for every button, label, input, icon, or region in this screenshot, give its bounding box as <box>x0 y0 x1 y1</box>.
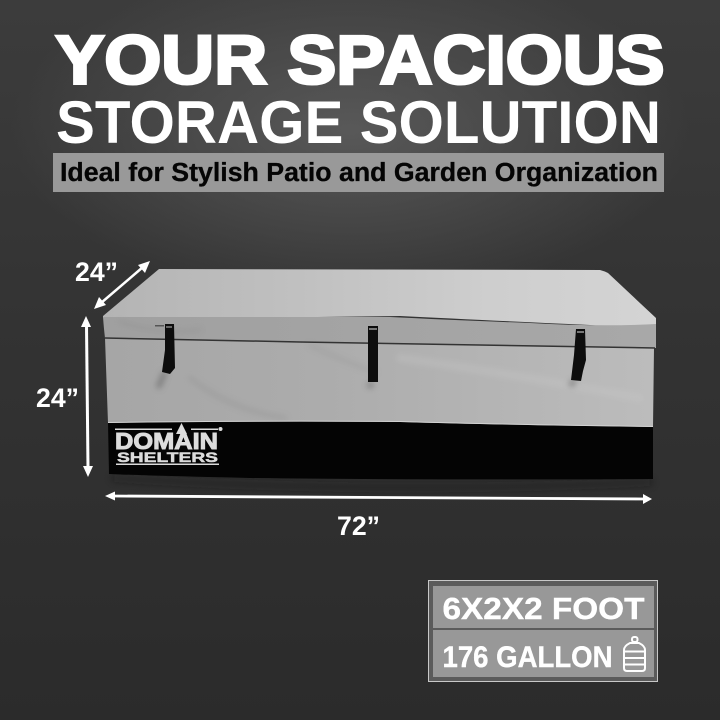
logo wordmark peak <box>176 423 187 434</box>
dimension arrow: height <box>81 316 93 477</box>
row: capacity <box>433 630 654 677</box>
logo top rule <box>115 428 218 430</box>
ground shadow <box>112 476 652 490</box>
fabric folds <box>120 322 640 418</box>
subtitle banner: Ideal for Stylish Patio and Garden Organization <box>60 159 658 187</box>
logo bottom rule <box>116 464 219 465</box>
height label: 24” <box>36 383 79 413</box>
title line 1: YOUR SPACIOUS <box>56 22 664 98</box>
depth label: 24” <box>75 257 118 287</box>
width label: 72” <box>337 511 380 541</box>
specs panel <box>428 580 658 682</box>
strap left <box>155 324 175 374</box>
storage box <box>103 269 656 490</box>
logo subtitle: SHELTERS <box>117 449 218 465</box>
front panel <box>105 338 654 427</box>
registered mark <box>218 427 222 431</box>
icon: water bottle <box>624 637 645 671</box>
strap shadows <box>158 372 575 388</box>
strap middle <box>368 326 378 382</box>
lid seam <box>105 338 655 348</box>
capacity text: 176 GALLON <box>442 641 612 674</box>
lid top face <box>103 269 656 328</box>
panel frame <box>428 580 658 682</box>
lid front band <box>103 317 656 348</box>
dimension arrow: depth <box>94 261 150 309</box>
subtitle banner <box>53 153 664 192</box>
row: dimensions <box>433 586 654 628</box>
dimension arrow: width <box>105 492 652 504</box>
logo <box>115 423 222 465</box>
logo wordmark: DOMAIN <box>115 428 218 454</box>
strap right <box>571 329 586 381</box>
base trim <box>108 421 653 426</box>
black base <box>108 422 653 479</box>
dimensions text: 6X2X2 FOOT <box>442 591 645 626</box>
title line 2: STORAGE SOLUTION <box>56 89 661 156</box>
